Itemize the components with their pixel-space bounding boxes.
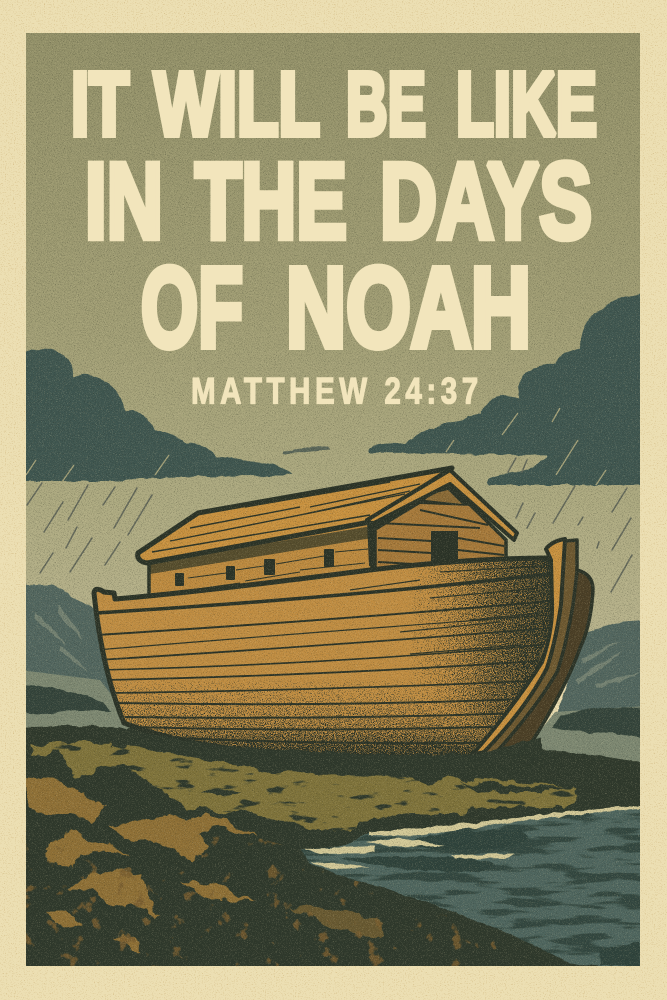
- left storm cloud: [20, 348, 293, 481]
- dark ground: [20, 726, 646, 972]
- stem post highlight: [472, 539, 565, 755]
- cabin wall plank lines: [188, 549, 368, 590]
- stern planks: [503, 568, 595, 748]
- right mountain: [558, 620, 640, 712]
- title line 3: NOAH: [286, 244, 531, 370]
- river water: [301, 807, 646, 972]
- left foothills: [26, 670, 130, 730]
- gable cornice: [370, 521, 372, 566]
- gable shadow: [376, 486, 469, 530]
- hull body: [94, 558, 556, 762]
- olive band dark mottling: [45, 742, 576, 831]
- rain streaks: [27, 458, 632, 592]
- title line 1: [71, 55, 597, 155]
- hull shading: [90, 550, 560, 765]
- hull planks: [98, 560, 550, 756]
- windows: [175, 549, 334, 586]
- door: [431, 531, 458, 564]
- gable roof trim: [367, 470, 517, 540]
- scripture reference: MATTHEW 24:37: [191, 371, 478, 412]
- title line 1: BE: [346, 55, 426, 155]
- left mountain: [26, 584, 111, 694]
- dark water near shore: [340, 830, 640, 966]
- right foothills: [536, 706, 640, 762]
- title line 2: [85, 140, 592, 261]
- right storm cloud: [368, 293, 646, 485]
- stem post plank: [472, 540, 577, 762]
- right mountain highlights: [575, 640, 640, 688]
- title line 1: LIKE: [456, 55, 597, 155]
- title line 2: IN: [85, 140, 163, 261]
- title line 2: THE: [195, 140, 347, 261]
- rain over clouds: [26, 408, 606, 485]
- gable end wall: [374, 503, 508, 568]
- title line 3: OF: [141, 244, 243, 370]
- left mountain highlights: [34, 606, 88, 672]
- sky: [26, 33, 640, 653]
- dark holes in olive band: [28, 752, 570, 796]
- orange earth patches: [26, 778, 385, 953]
- distant cloud wisp: [282, 445, 330, 454]
- gable stippled peak: [425, 490, 462, 504]
- roof plank lines: [152, 482, 420, 552]
- title line 1: IT: [71, 55, 129, 155]
- dark water ripples: [300, 805, 640, 966]
- cabin wall top shadow: [150, 526, 372, 574]
- gable plank lines: [378, 510, 504, 565]
- title line 2: DAYS: [380, 140, 592, 261]
- olive earth band: [28, 742, 582, 833]
- ark ground shadow: [118, 726, 545, 777]
- cabin side wall: [147, 525, 374, 594]
- ark: [90, 468, 593, 765]
- title line 1: WILL: [154, 55, 320, 155]
- title line 3: [141, 244, 531, 370]
- cream foam streaks: [303, 806, 640, 869]
- brown mottling on dark slope: [26, 836, 496, 966]
- title: [71, 55, 597, 370]
- main roof: [138, 468, 452, 563]
